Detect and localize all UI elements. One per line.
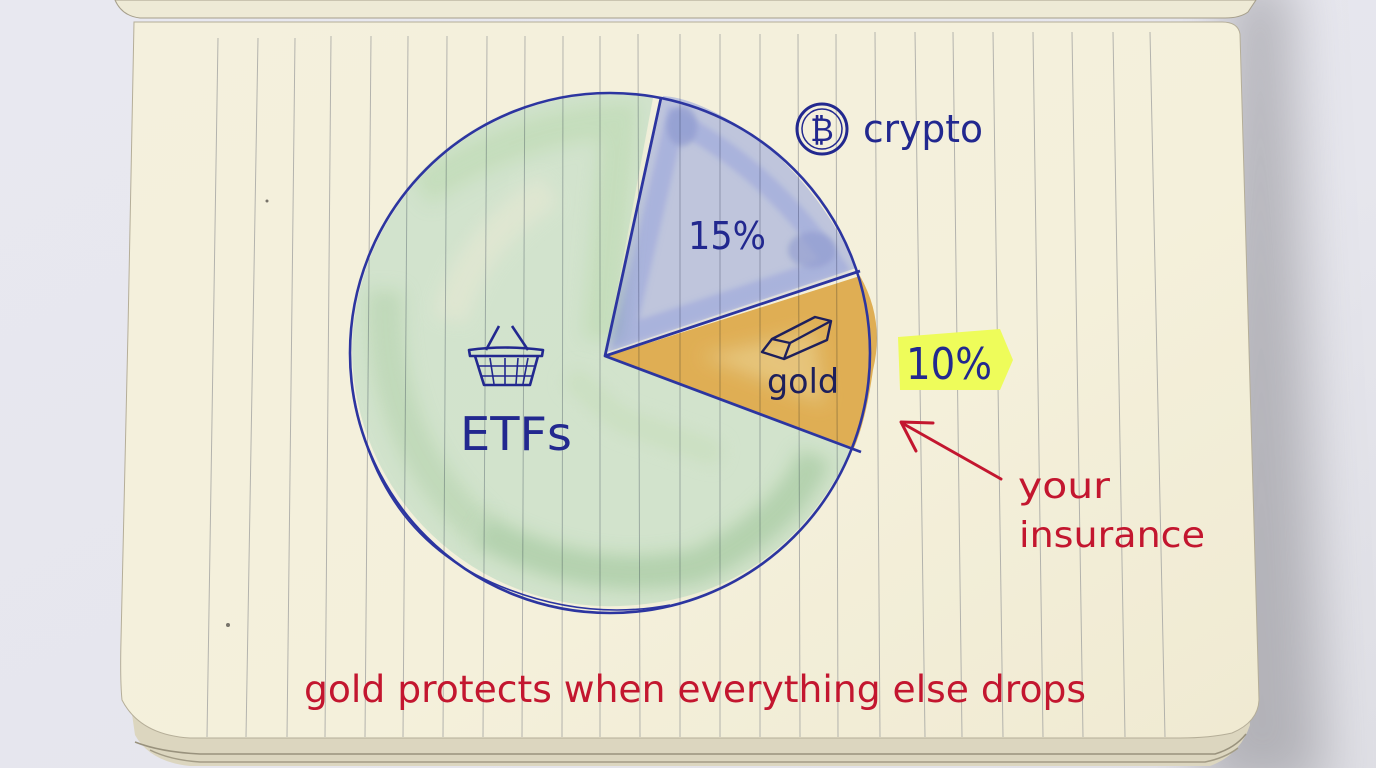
label: ETFs: ETFs xyxy=(460,407,572,461)
label: crypto: crypto xyxy=(863,107,983,151)
pie outline xyxy=(350,93,870,613)
icon: bitcoin xyxy=(797,104,847,154)
highlight: 10% xyxy=(898,329,1013,390)
paper specks xyxy=(226,200,268,627)
label: 15%: 15% xyxy=(688,214,766,258)
notebook shadow xyxy=(1200,0,1325,768)
notebook page xyxy=(121,22,1259,738)
label: 10%: 10% xyxy=(906,339,992,390)
slice: ETFs watercolor xyxy=(352,94,852,606)
arrow to gold slice xyxy=(901,422,1001,479)
icon: gold bar xyxy=(762,317,831,359)
slice: gold watercolor xyxy=(608,276,877,448)
callout: your insurance xyxy=(1018,466,1205,556)
icon: bitcoin: ₿ xyxy=(810,111,834,149)
label: gold: gold xyxy=(767,362,839,402)
slice: crypto watercolor xyxy=(607,96,856,352)
callout: your insurance: insurance xyxy=(1019,515,1205,556)
caption: gold protects when everything else drops xyxy=(304,668,1086,711)
previous page top edge xyxy=(115,0,1256,18)
ruled lines xyxy=(207,32,1165,737)
slice dividers xyxy=(605,98,861,452)
pie chart xyxy=(350,93,877,613)
callout: your insurance: your xyxy=(1018,466,1110,507)
notebook page stack xyxy=(130,700,1250,766)
icon: shopping basket xyxy=(469,326,543,385)
